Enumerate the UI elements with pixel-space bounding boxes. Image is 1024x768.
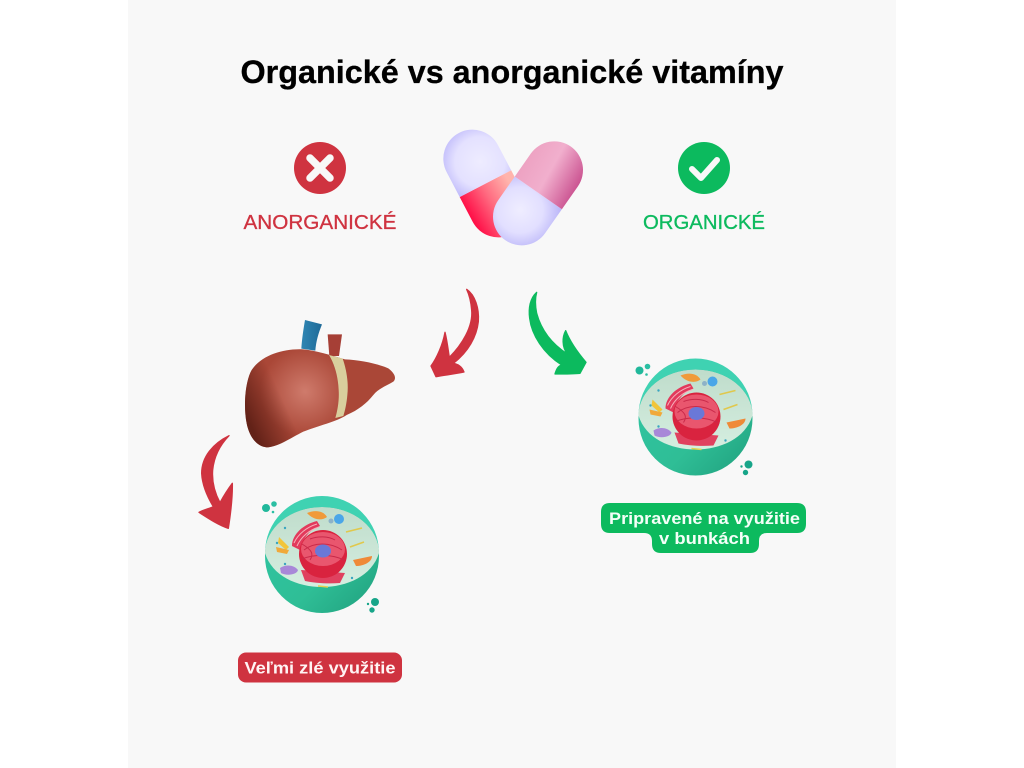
- label: organické: ORGANICKÉ: [643, 211, 765, 234]
- icon: liver: [245, 320, 395, 447]
- title: Organické vs anorganické vitamíny: [240, 54, 784, 90]
- callout: ready for use in cells: Pripravené na využitie: [609, 509, 800, 528]
- icon: capsules: [472, 159, 554, 217]
- callout: very poor use: Veľmi zlé využitie: [244, 658, 396, 678]
- label: anorganické: ANORGANICKÉ: [244, 211, 396, 234]
- callout: very poor use: [238, 652, 402, 682]
- icon: green check: [678, 142, 730, 194]
- background panel: [128, 0, 896, 768]
- icon: cell (inorganic): [262, 496, 379, 613]
- arrow: pill to liver: [431, 289, 478, 377]
- callout: ready for use in cells: v bunkách: [659, 529, 750, 548]
- icon: red cross: [294, 142, 346, 194]
- arrow: liver to cell: [199, 436, 232, 528]
- arrow: pill to cell (green): [529, 292, 586, 374]
- callout: ready for use in cells: [601, 503, 806, 553]
- icon: cell (organic): [636, 358, 752, 476]
